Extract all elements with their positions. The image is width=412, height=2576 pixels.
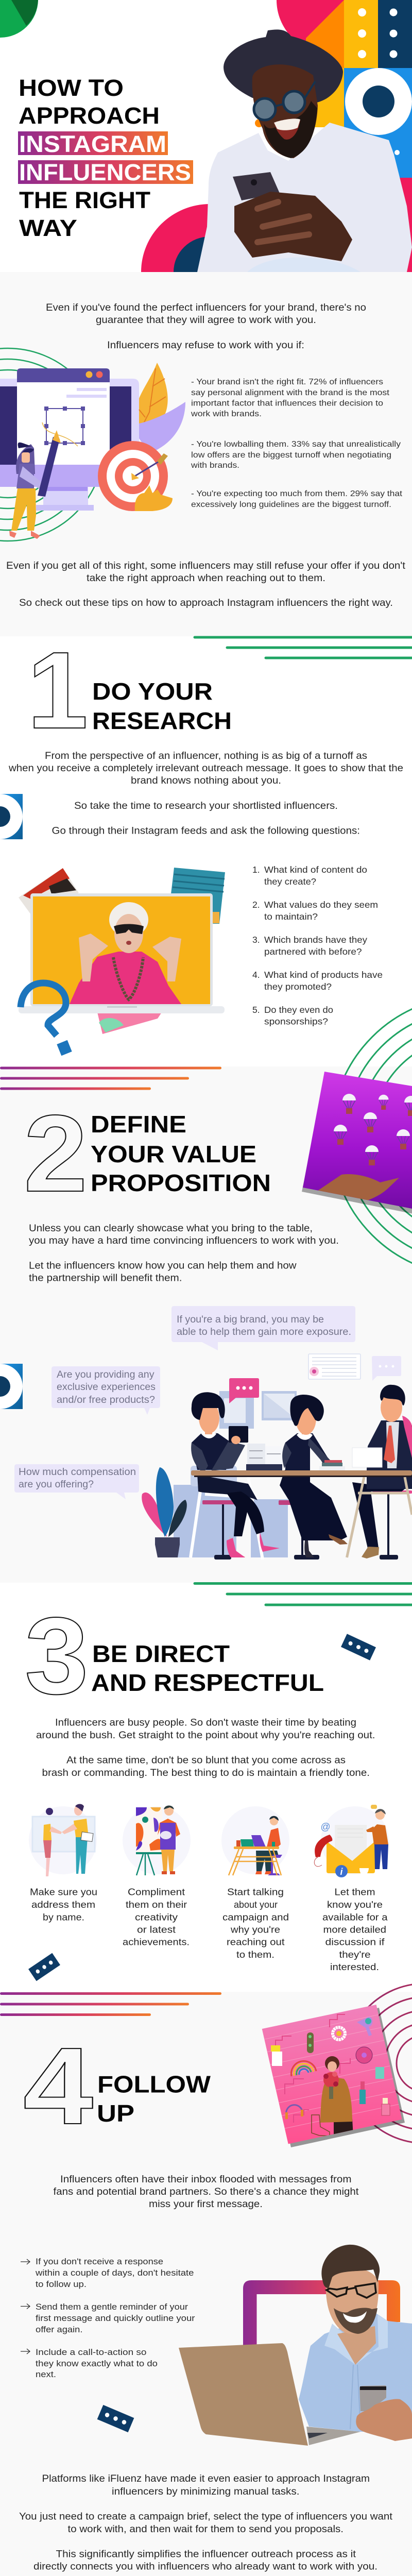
caption: Start talking <box>227 1887 284 1897</box>
numeral 4: 4 <box>23 2025 93 2147</box>
table with items <box>191 1444 412 1477</box>
decor: green lines <box>195 637 412 658</box>
tip text: to follow up. <box>36 2279 87 2289</box>
photo: smiling man with laptop and phone <box>179 2245 412 2446</box>
caption <box>322 1887 388 1972</box>
caption: they're <box>339 1950 371 1960</box>
questions list <box>252 865 383 1026</box>
white table frame <box>191 1477 263 1560</box>
intro text: Even if you've found the perfect influencers for your brand, there's no <box>46 302 366 313</box>
section 3 text: At the same time, don't be so blunt that you come across as <box>66 1755 346 1766</box>
callout: big brand: able to help them gain more exposure. <box>177 1327 351 1337</box>
heading: be direct and respectful: AND RESPECTFUL <box>91 1669 324 1696</box>
decor: navy tile <box>341 1634 376 1660</box>
questions list: partnered with before? <box>264 946 362 957</box>
intro text: guarantee that they will agree to work with you. <box>96 315 316 326</box>
intro text: Influencers may refuse to work with you if: <box>107 340 304 351</box>
title <box>18 75 193 241</box>
closing intro text: Even if you get all of this right, some influencers may still refuse your offer if you don't <box>6 561 406 571</box>
section 1 text <box>8 751 403 837</box>
document card <box>308 1354 360 1379</box>
callout: exclusive experiences: Are you providing any <box>57 1369 154 1380</box>
heading: define your value proposition: PROPOSITION <box>91 1170 271 1196</box>
heading: do your research <box>92 678 232 734</box>
photo: man with hat looking at phone <box>197 29 412 272</box>
follow-up tips list <box>21 2257 195 2379</box>
decor: purple concentric arcs <box>345 1984 412 2143</box>
target with arrow <box>98 441 173 511</box>
tip 1: address by name <box>29 1804 97 1923</box>
person: woman with phone <box>191 1392 280 1560</box>
heading: define your value proposition: DEFINE <box>91 1111 186 1138</box>
questions list: to maintain? <box>264 911 318 922</box>
caption: interested. <box>330 1962 379 1972</box>
numeral 3: 3 <box>25 1595 89 1717</box>
closing text: You just need to create a campaign brief, select the type of influencers you want <box>19 2511 393 2522</box>
person with pen <box>9 430 61 539</box>
decor: blue ring block <box>0 794 23 839</box>
illustration: designer with monitor and target <box>0 348 185 541</box>
reasons list: important factor that influences their decision to <box>191 399 383 408</box>
section 2 text: the partnership will benefit them. <box>29 1273 182 1284</box>
tip text: Include a call-to-action so <box>36 2347 146 2357</box>
decor: gradient lines <box>0 1066 221 1090</box>
tip text <box>36 2302 195 2334</box>
heading: be direct and respectful <box>91 1640 324 1696</box>
caption: about your <box>234 1900 278 1910</box>
question mark <box>21 983 72 1056</box>
closing text: Platforms like iFluenz have made it even easier to approach Instagram <box>42 2473 370 2484</box>
caption: more detailed <box>323 1925 386 1935</box>
title: INSTAGRAM <box>19 131 166 157</box>
callout: big brand: If you're a big brand, you may be <box>177 1314 324 1325</box>
intro text <box>46 302 366 351</box>
reasons list: - You're lowballing them. 33% say that unrealistically <box>191 440 401 449</box>
caption <box>30 1887 97 1923</box>
callout: exclusive experiences: and/or free products? <box>57 1395 155 1405</box>
caption: Make sure you <box>30 1887 97 1897</box>
tip text <box>35 2257 194 2289</box>
title: APPROACH <box>19 103 160 129</box>
decor: green concentric arcs <box>331 996 412 1276</box>
reasons list: excessively long guidelines are the biggest turnoff. <box>191 500 391 509</box>
tan table frame and man <box>347 1385 412 1560</box>
caption: creativity <box>135 1912 178 1923</box>
callout: compensation: How much compensation <box>19 1467 136 1478</box>
grandma figure <box>70 902 181 1004</box>
caption: campaign and <box>222 1912 289 1923</box>
decor: navy tile <box>28 1953 60 1981</box>
section 4 text: Influencers often have their inbox flooded with messages from <box>60 2174 351 2185</box>
questions list: 1. <box>252 865 260 875</box>
closing intro text <box>6 561 406 608</box>
section 1 text: So take the time to research your shortlisted influencers. <box>74 801 338 811</box>
section 2 text: you may have a hard time convincing influencers to work with you. <box>29 1235 339 1246</box>
questions list: Do they even do <box>264 1005 333 1015</box>
section 3 text: Influencers are busy people. So don't waste their time by beating <box>55 1718 356 1728</box>
caption: know you're <box>327 1900 383 1910</box>
caption: why you're <box>230 1925 280 1935</box>
section 1 text: From the perspective of an influencer, nothing is as big of a turnoff as <box>45 751 367 761</box>
section 3 text <box>36 1718 375 1778</box>
caption: or latest <box>137 1925 176 1935</box>
closing text: to work with, and then wait for them to send you proposals. <box>68 2524 344 2535</box>
questions list: 3. <box>252 935 260 945</box>
chat bubbles <box>229 1356 401 1403</box>
closing intro text: take the right approach when reaching out to them. <box>87 573 325 584</box>
caption: address them <box>31 1900 95 1910</box>
decor: navy tile <box>97 2405 134 2432</box>
section 2 text: Unless you can clearly showcase what you bring to the table, <box>29 1223 313 1234</box>
questions list: 2. <box>252 900 260 910</box>
hero panel <box>0 0 412 272</box>
numeral 2: 2 <box>24 1092 88 1214</box>
caption <box>123 1887 190 1947</box>
closing text: directly connects you with influencers who already want to work with you. <box>33 2562 377 2572</box>
caption: by name. <box>43 1912 84 1923</box>
photo: purple parachutes over hand <box>299 1066 412 1216</box>
callout: compensation: are you offering? <box>19 1479 94 1490</box>
tip text: Send them a gentle reminder of your <box>36 2302 188 2312</box>
section 3 text: brash or commanding. The best thing to do is maintain a friendly tone. <box>42 1768 370 1778</box>
tip text: within a couple of days, don't hesitate <box>35 2268 194 2278</box>
heading: define your value proposition: YOUR VALUE <box>91 1141 256 1167</box>
heading: define your value proposition <box>91 1111 271 1196</box>
caption: reaching out <box>227 1937 284 1947</box>
plant <box>142 1467 187 1557</box>
leaves <box>139 363 185 453</box>
closing text: This significantly simplifies the influencer outreach process as it <box>56 2549 356 2560</box>
caption: available for a <box>322 1912 388 1923</box>
title: THE RIGHT <box>19 187 150 213</box>
person: woman at table <box>279 1395 348 1560</box>
arrow <box>21 2349 30 2354</box>
reasons list: work with brands. <box>191 410 262 418</box>
reasons list: - You're expecting too much from them. 29% say that <box>191 489 403 498</box>
tip 2: compliment <box>123 1805 191 1947</box>
section 1 text: Go through their Instagram feeds and ask the following questions: <box>52 825 360 837</box>
questions list: 4. <box>252 970 260 980</box>
caption: achievements. <box>123 1937 190 1947</box>
caption: Let them <box>335 1887 375 1897</box>
heading: be direct and respectful: BE DIRECT <box>92 1640 230 1667</box>
photo: woman on pink brick wall with stickers <box>258 2002 409 2148</box>
reasons list: low offers are the biggest turnoff when negotiating <box>191 451 391 460</box>
reasons list: with brands. <box>191 461 239 470</box>
section 1 text: brand knows nothing about you. <box>131 775 281 786</box>
section 4 text <box>54 2174 359 2210</box>
heading: do your research: DO YOUR <box>92 678 213 705</box>
caption: them on their <box>126 1900 187 1910</box>
callout: big brand <box>171 1306 355 1350</box>
title: HOW TO <box>19 75 124 101</box>
decor: colourful geometric blocks <box>141 0 412 272</box>
tip 4: let them know <box>314 1805 389 1972</box>
caption: discussion if <box>325 1937 385 1947</box>
icon: envelope, phone and woman: @ <box>320 1822 331 1833</box>
section 2 text: Let the influencers know how you can help them and how <box>29 1260 297 1272</box>
questions list: sponsorships? <box>264 1016 328 1026</box>
icon: man at desk with laptops <box>221 1806 289 1875</box>
closing text: influencers by minimizing manual tasks. <box>112 2486 300 2497</box>
reasons list: say personal alignment with the brand is the most <box>191 388 390 397</box>
title: WAY <box>19 215 77 241</box>
title: INFLUENCERS <box>19 159 191 185</box>
caption: Compliment <box>128 1887 185 1897</box>
illustration: team meeting at table <box>142 1354 412 1560</box>
arrow <box>21 2304 30 2309</box>
section 4 text: fans and potential brand partners. So there's a chance they might <box>54 2187 359 2197</box>
icon: envelope, phone and woman <box>314 1805 389 1877</box>
questions list: they promoted? <box>264 981 332 992</box>
intro panel <box>0 302 406 608</box>
questions list: What kind of products have <box>264 970 383 980</box>
tip text: first message and quickly outline your <box>36 2313 195 2323</box>
section 3 panel <box>25 1584 412 1981</box>
section 4 text: miss your first message. <box>149 2199 263 2210</box>
arrow <box>21 2259 30 2264</box>
questions list: they create? <box>264 876 316 887</box>
questions list: What kind of content do <box>264 865 367 875</box>
reasons list <box>191 378 403 509</box>
heading: follow up: FOLLOW <box>97 2071 211 2098</box>
numeral 1: 1 <box>27 629 88 751</box>
tip text: offer again. <box>36 2325 82 2334</box>
icon: envelope, phone and woman: i <box>340 1867 343 1877</box>
questions list: Which brands have they <box>264 935 367 945</box>
illustration: laptop with grandma photo <box>19 868 225 1056</box>
section 1 text: when you receive a completely irrelevant outreach message. It goes to show that the <box>8 763 403 774</box>
section 4 panel <box>0 1984 412 2572</box>
section 1 panel <box>0 629 412 1056</box>
heading: follow up <box>97 2071 211 2127</box>
decor: green lines <box>195 1584 412 1605</box>
icon: painter at easel <box>123 1805 191 1875</box>
tip text: next. <box>36 2369 56 2379</box>
callout: compensation <box>14 1464 139 1499</box>
tip text: If you don't receive a response <box>36 2257 163 2266</box>
heading: do your research: RESEARCH <box>92 707 232 734</box>
tip 3: start talking <box>221 1806 289 1960</box>
section 2 text <box>29 1223 339 1284</box>
section 2 panel <box>0 996 412 1560</box>
questions list: 5. <box>252 1005 260 1015</box>
reasons list: - Your brand isn't the right fit. 72% of influencers <box>191 378 383 386</box>
tip text: they know exactly what to do <box>36 2359 158 2368</box>
decor: blue ring block <box>0 1364 23 1409</box>
tip text <box>36 2347 158 2379</box>
callout: exclusive experiences <box>52 1366 160 1415</box>
caption: to them. <box>236 1950 274 1960</box>
heading: follow up: UP <box>97 2100 134 2127</box>
decor: green corner circle <box>0 0 38 38</box>
closing text <box>19 2473 393 2572</box>
decor: gradient lines <box>0 1992 221 2016</box>
questions list: What values do they seem <box>264 900 378 910</box>
caption <box>222 1887 289 1960</box>
callout: exclusive experiences: exclusive experiences <box>57 1382 156 1393</box>
icon: handshake <box>29 1804 97 1876</box>
section 3 text: around the bush. Get straight to the point about why you're reaching out. <box>36 1730 375 1741</box>
closing intro text: So check out these tips on how to approach Instagram influencers the right way. <box>19 598 393 608</box>
